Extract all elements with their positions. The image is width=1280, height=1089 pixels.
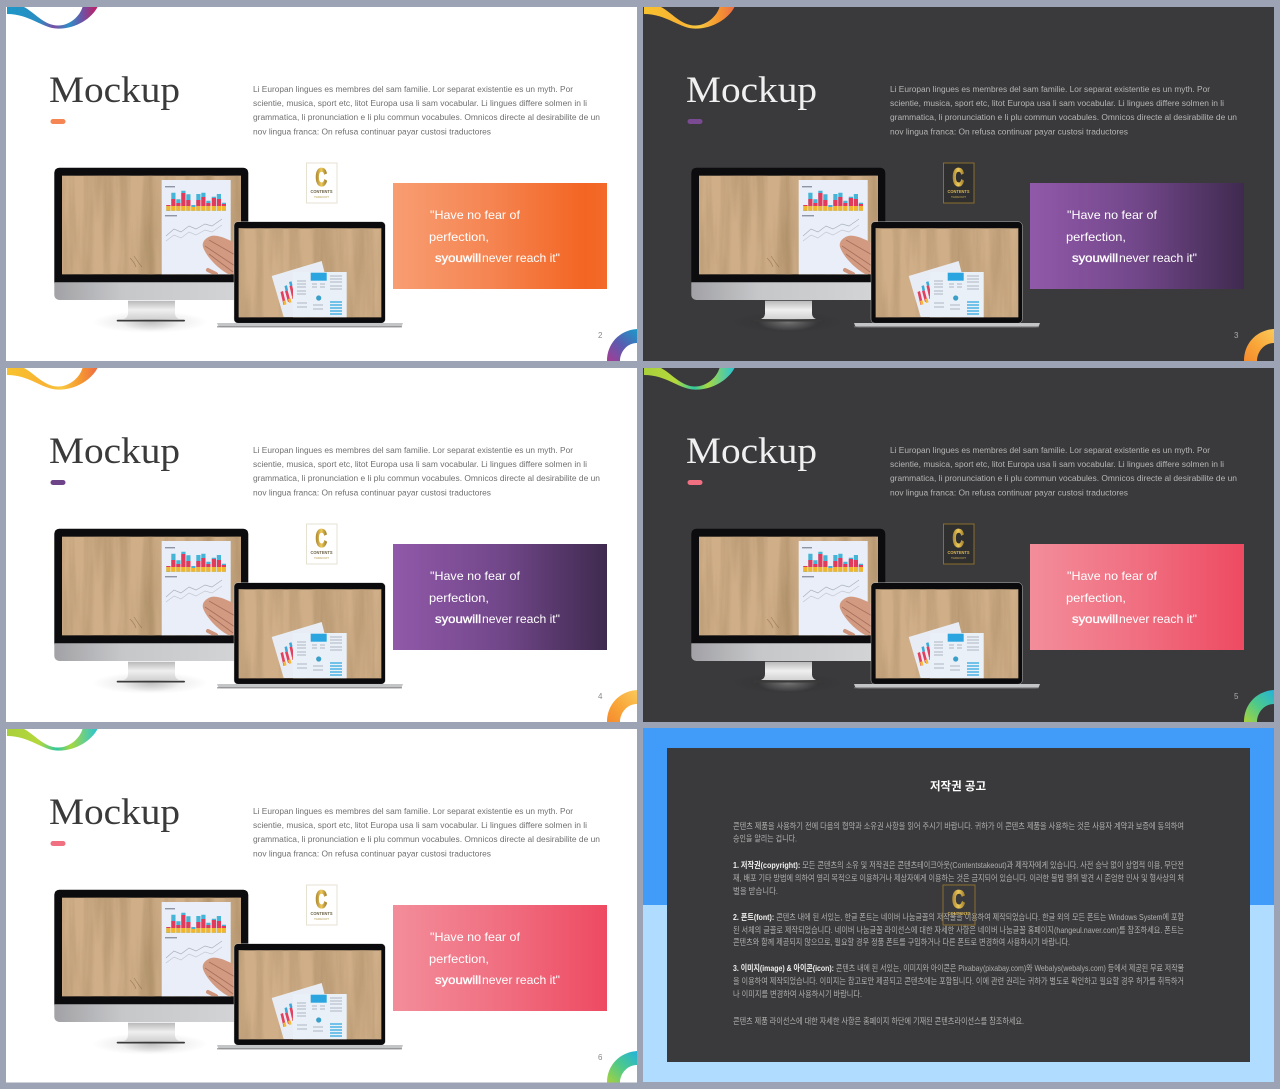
ribbon top-left — [7, 7, 98, 29]
body text: scientie, musica, sport etc, litot Europa usa li sam vocabular. Li lingues differe solmen in li — [890, 98, 1224, 108]
logo: CONTENTS — [310, 550, 332, 555]
logo: C — [952, 164, 964, 192]
corner ribbon — [1244, 690, 1274, 722]
body text: Li Europan lingues es membres del sam familie. Lor separat existentie es un myth. Por — [890, 84, 1210, 94]
quote box: perfection, — [1066, 591, 1126, 605]
quote box: syouwill — [435, 612, 481, 626]
quote box: syouwill — [1072, 251, 1118, 265]
section 1: copyright — [733, 860, 1184, 896]
accent bar — [50, 480, 66, 485]
section 3: image and icon: 나 이미지를 변경하여 사용하시기 바랍니다. — [733, 989, 862, 999]
slide 4: dark with pink accent — [643, 368, 1274, 722]
quote box: never reach it" — [1119, 612, 1197, 626]
body text: Li Europan lingues es membres del sam familie. Lor separat existentie es un myth. Por — [890, 445, 1210, 455]
logo watermark — [943, 885, 975, 925]
logo: CONTENTS — [310, 911, 332, 916]
notice intro text: 콘텐츠 제품을 사용하기 전에 다음의 협약과 소유권 사항을 읽어 주시기 바랍니다. 귀하가 이 콘텐츠 제품을 사용하는 것은 사용자 계약과 보증에 동의하여 — [733, 821, 1184, 831]
logo: C — [316, 164, 327, 192]
section 1: copyright: 1. 저작권(copyright): 모든 콘텐츠의 소유 및 저작권은 콘텐츠테이크아웃(Contentstakeout)과 제작자에게 있습니다. 사전 승낙 없이 상업적 이용, 무단전 — [733, 860, 1184, 870]
body text: grammatica, li pronunciation e li plu commun vocabules. Omnicos directe al desirabilite de un — [890, 473, 1237, 483]
section 2: font: 2. 폰트(font): 콘텐츠 내에 된 서있는, 한글 폰트는 네이버 나눔글꼴의 저작물을 이용하여 제작되었습니다. 한글 외의 모든 폰트는 Windows System에 포함 — [733, 912, 1184, 922]
quote box — [393, 905, 607, 1011]
slide 6: copyright notice — [643, 728, 1274, 1082]
notice intro text — [733, 821, 1184, 844]
quote box: never reach it" — [482, 251, 560, 265]
quote box: perfection, — [1066, 230, 1126, 244]
logo: TAKEOUT — [314, 917, 329, 921]
notice intro text: 승인을 알리는 겁니다. — [733, 834, 797, 844]
slide title: Mockup — [49, 431, 180, 472]
ribbon top-left — [644, 368, 734, 390]
slide title: Mockup — [686, 431, 817, 472]
body text — [253, 84, 600, 136]
quote box: syouwill — [435, 973, 481, 987]
slide 2: dark with purple accent — [643, 7, 1274, 361]
accent bar — [50, 841, 66, 846]
quote box: syouwill — [1072, 612, 1118, 626]
logo: TAKEOUT — [314, 195, 329, 199]
quote box: "Have no fear of — [430, 930, 521, 944]
slide 2 background — [643, 7, 1274, 361]
dark notice panel — [667, 748, 1250, 1062]
accent bar — [50, 119, 66, 124]
body text: grammatica, li pronunciation e li plu commun vocabules. Omnicos directe al desirabilite de un — [253, 834, 600, 844]
slide 3: white with purple accent — [6, 368, 637, 722]
logo: C — [952, 525, 964, 553]
quote box: "Have no fear of — [1067, 208, 1158, 222]
slide 3 background — [6, 368, 637, 722]
section 3: image and icon — [733, 963, 1184, 999]
body text — [890, 84, 1237, 136]
body text: grammatica, li pronunciation e li plu commun vocabules. Omnicos directe al desirabilite de un — [253, 473, 600, 483]
logo: TAKEOUT — [951, 556, 966, 560]
corner ribbon — [1244, 329, 1274, 361]
body text: grammatica, li pronunciation e li plu commun vocabules. Omnicos directe al desirabilite de un — [253, 112, 600, 122]
logo — [306, 885, 337, 925]
quote box — [1030, 183, 1244, 289]
device mockup: desktop and laptop — [54, 890, 403, 1055]
body text: Li Europan lingues es membres del sam familie. Lor separat existentie es un myth. Por — [253, 445, 573, 455]
body text — [253, 445, 600, 498]
section 3: image and icon: 을 이용하여 제작되었습니다. 이미지는 참고로만 제공되고 콘텐츠에는 포함됩니다. 이에 관련 권리는 귀하가 별도로 확인하고 필요할 경우 허가를 취득하거 — [733, 976, 1184, 986]
quote box: perfection, — [429, 952, 489, 966]
light blue background bottom — [643, 905, 1274, 1082]
ribbon top-left — [644, 7, 734, 29]
section 3: image and icon: 3. 이미지(image) & 아이콘(icon): 콘텐츠 내에 된 서있는, 이미지와 아이콘은 Pixabay(pixabay.com)와 Webalys(webalys.com) 등에서 제공된 무료 저작물 — [733, 963, 1184, 973]
accent bar — [688, 119, 702, 124]
quote box — [393, 544, 607, 650]
logo: C — [316, 525, 327, 553]
logo — [944, 524, 974, 564]
device mockup: desktop and laptop — [691, 168, 1040, 333]
slide title: Mockup — [49, 70, 180, 111]
section 1: copyright: 재, 배포 기타 방법에 의하여 영리 목적으로 이용하거나 제삼자에게 이용하는 것은 금지되어 있습니다. 이러한 불법 행위 발견 시 준엄한 민사 및 형사상의 처 — [733, 873, 1184, 883]
device mockup: desktop and laptop — [54, 529, 403, 694]
notice heading: 저작권 공고 — [930, 779, 986, 793]
page number: 5 — [1234, 692, 1239, 701]
body text: grammatica, li pronunciation e li plu commun vocabules. Omnicos directe al desirabilite de un — [890, 112, 1237, 122]
logo: CONTENTS — [948, 189, 970, 194]
blue background top — [643, 728, 1274, 905]
body text: nov lingua franca: On refusa continuar payar custosi traductores — [890, 488, 1128, 498]
logo — [306, 524, 337, 564]
body text: nov lingua franca: On refusa continuar payar custosi traductores — [253, 126, 491, 136]
logo: CONTENTS — [310, 189, 332, 194]
body text: nov lingua franca: On refusa continuar payar custosi traductores — [253, 488, 491, 498]
logo: C — [316, 886, 327, 914]
ribbon top-left — [7, 729, 98, 751]
body text: Li Europan lingues es membres del sam familie. Lor separat existentie es un myth. Por — [253, 84, 573, 94]
quote box: "Have no fear of — [430, 569, 521, 583]
slide 5 background — [6, 729, 637, 1082]
quote box: "Have no fear of — [430, 208, 521, 222]
quote box — [393, 183, 607, 289]
body text: Li Europan lingues es membres del sam familie. Lor separat existentie es un myth. Por — [253, 806, 573, 816]
quote box: never reach it" — [482, 973, 560, 987]
body text: scientie, musica, sport etc, litot Europa usa li sam vocabular. Li lingues differe solmen in li — [253, 459, 587, 469]
body text: nov lingua franca: On refusa continuar payar custosi traductores — [890, 126, 1128, 136]
body text: scientie, musica, sport etc, litot Europa usa li sam vocabular. Li lingues differe solmen in li — [253, 820, 587, 830]
corner ribbon — [607, 1051, 637, 1082]
slide 1 background — [6, 7, 637, 361]
accent bar — [688, 480, 702, 485]
body text: scientie, musica, sport etc, litot Europa usa li sam vocabular. Li lingues differe solmen in li — [253, 98, 587, 108]
body text — [253, 806, 600, 858]
quote box: never reach it" — [1119, 251, 1197, 265]
corner ribbon — [607, 329, 637, 361]
corner ribbon — [607, 690, 637, 722]
section 2: font: 콘텐츠와 함께 제공되지 않으므로, 필요할 경우 정품 폰트를 구입하거나 다른 폰트로 변경하여 사용하시기 바랍니다. — [733, 937, 1070, 947]
quote box: never reach it" — [482, 612, 560, 626]
quote box: "Have no fear of — [1067, 569, 1158, 583]
device mockup: desktop and laptop — [54, 168, 403, 333]
quote box — [1030, 544, 1244, 650]
logo — [306, 163, 337, 203]
license footer line: 콘텐츠 제품 라이선스에 대한 자세한 사항은 홈페이지 하단에 기재된 콘텐츠라이선스를 참조하세요. — [733, 1016, 1024, 1026]
quote box: perfection, — [429, 591, 489, 605]
slide title: Mockup — [686, 70, 817, 111]
device mockup: desktop and laptop — [691, 529, 1040, 694]
ribbon top-left — [7, 368, 98, 390]
logo: TAKEOUT — [314, 556, 329, 560]
logo: CONTENTS — [948, 550, 970, 555]
logo watermark: C — [952, 886, 965, 914]
quote box: syouwill — [435, 251, 481, 265]
logo — [944, 163, 974, 203]
slide 5: white with pink accent — [6, 729, 637, 1082]
body text — [890, 445, 1237, 498]
slide 4 background — [643, 368, 1274, 722]
page number: 3 — [1234, 331, 1239, 340]
quote box: perfection, — [429, 230, 489, 244]
body text: nov lingua franca: On refusa continuar payar custosi traductores — [253, 848, 491, 858]
page number: 6 — [598, 1053, 603, 1062]
section 2: font: 된 서체의 글꼴로 제작되었습니다. 네이버 나눔글꼴 라이선스에 대한 자세한 사항은 네이버 나눔글꼴 홈페이지(hangeul.naver.com)를 참조하세요. 폰트는 — [733, 925, 1184, 935]
slide 1: white with orange accent — [6, 7, 637, 361]
logo: TAKEOUT — [951, 195, 966, 199]
page number: 2 — [598, 331, 603, 340]
section 2: font — [733, 912, 1184, 947]
slide title: Mockup — [49, 792, 180, 833]
page number: 4 — [598, 692, 603, 701]
section 1: copyright: 벌을 받습니다. — [733, 886, 778, 896]
body text: scientie, musica, sport etc, litot Europa usa li sam vocabular. Li lingues differe solmen in li — [890, 459, 1224, 469]
logo watermark: CONTENTS — [948, 911, 970, 916]
